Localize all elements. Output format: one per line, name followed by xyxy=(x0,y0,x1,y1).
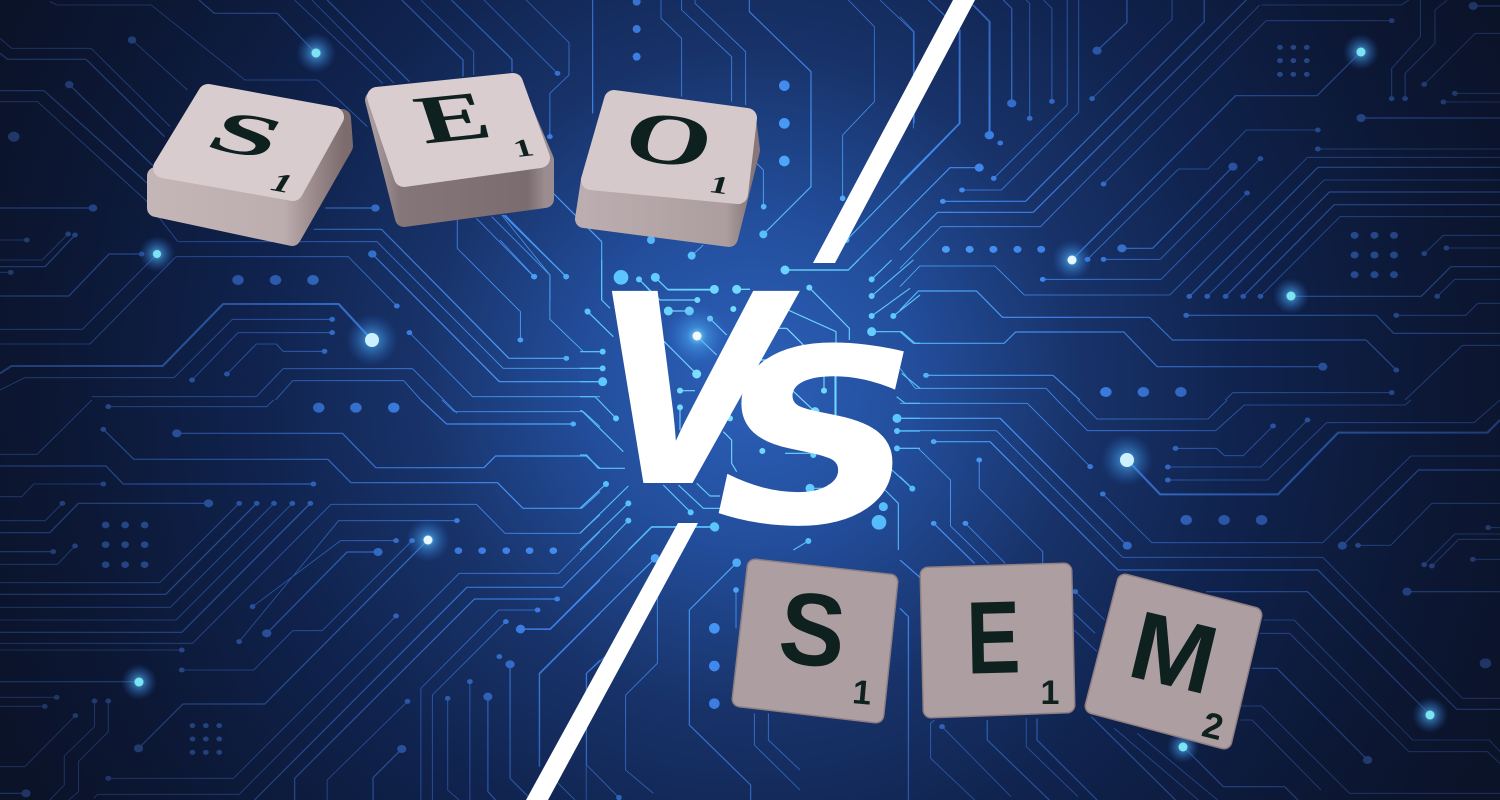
tile: S: 1 xyxy=(264,168,300,198)
tile: M: M xyxy=(1120,591,1228,716)
circuit traces: bottom left xyxy=(0,400,600,800)
circuit traces: top left xyxy=(0,0,600,413)
circuit traces: bottom right xyxy=(900,400,1500,800)
heading: VS: V xyxy=(591,234,800,539)
scrabble word: SEM xyxy=(740,567,1254,748)
tile: E: E xyxy=(406,77,500,159)
tile: E xyxy=(374,77,545,218)
scrabble word: SEO xyxy=(156,77,751,238)
circuit traces: bottom centre xyxy=(521,512,800,800)
circuit traces: top right xyxy=(900,0,1500,400)
tile: O xyxy=(584,95,751,238)
tile: S: S xyxy=(774,570,851,691)
circuit traces: centre behind VS xyxy=(580,260,920,550)
diagonal divider: lower segment xyxy=(526,523,698,800)
heading: VS xyxy=(591,234,919,580)
circuit traces: top centre xyxy=(500,0,990,300)
tile: S: S xyxy=(195,98,297,171)
tile: O: 1 xyxy=(706,170,733,200)
tile: E: E xyxy=(965,579,1021,696)
tile: E: 1 xyxy=(510,134,537,163)
tile: E: 1 xyxy=(1041,674,1059,712)
tile: E xyxy=(928,571,1067,712)
heading: VS: S xyxy=(715,299,919,580)
tile: O: O xyxy=(615,95,723,185)
tile: S xyxy=(156,94,344,237)
tile: S xyxy=(740,567,890,715)
tile: S: 1 xyxy=(851,673,873,713)
tile: M xyxy=(1093,582,1254,748)
tile: M: 2 xyxy=(1198,704,1227,748)
diagonal divider: upper segment xyxy=(813,0,975,263)
